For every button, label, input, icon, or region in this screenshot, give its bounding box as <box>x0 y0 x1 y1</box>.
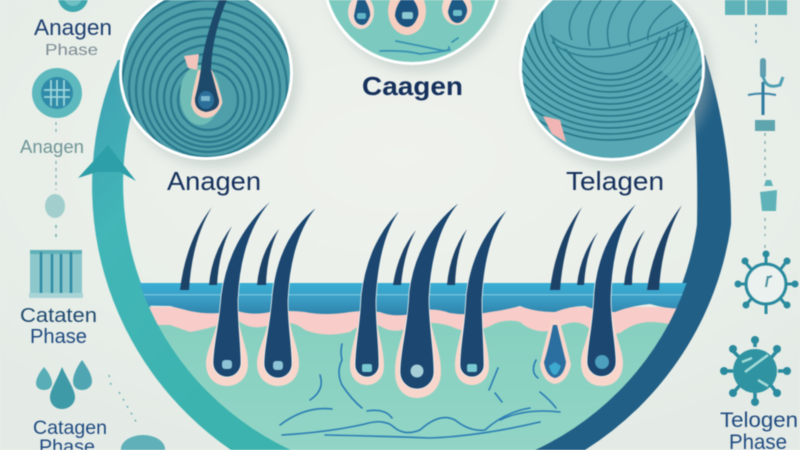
epidermis blue layer <box>100 283 720 315</box>
text: Catatten Phase: Cataten <box>20 305 97 327</box>
text: Catagen Phase <box>33 417 107 450</box>
cycle arrow: teal <box>78 60 300 450</box>
icon: water drops <box>36 360 92 409</box>
text: Catatten Phase <box>20 305 97 348</box>
follicle bulbs <box>354 0 370 25</box>
icon: block <box>755 120 775 131</box>
follicle 5 <box>455 207 510 385</box>
label: Anagen: Anagen <box>167 166 261 196</box>
panel: telagen circle <box>519 0 706 162</box>
text: Telogen Phase <box>720 409 798 450</box>
icon: small circle <box>45 194 65 218</box>
text: Catatten Phase: Phase <box>30 326 87 348</box>
icon: cup <box>760 180 777 211</box>
surface light line <box>100 294 720 296</box>
text: Anagen Phase: Anagen <box>34 15 112 40</box>
text: Anagen grey: Anagen <box>20 137 84 157</box>
dashed connector <box>764 218 766 236</box>
text: Telogen Phase: Telogen <box>720 409 798 432</box>
pink skin layer <box>100 307 720 335</box>
top strand bundle <box>548 0 688 50</box>
short hair strands <box>180 205 682 290</box>
icon: blob <box>121 435 165 450</box>
dotted connector <box>109 375 138 425</box>
follicle 6: fading <box>540 320 571 384</box>
text: Anagen Phase: Phase <box>45 42 98 59</box>
panel: catagen circle <box>322 0 502 65</box>
follicle 1 <box>206 197 275 386</box>
swirl strands <box>122 0 290 158</box>
icon: top circle <box>58 0 88 12</box>
circle shadows <box>125 0 711 169</box>
blood vessels <box>280 344 560 438</box>
right sidebar <box>720 0 798 450</box>
follicle 3 <box>350 207 403 385</box>
icon: virus outline <box>734 250 798 314</box>
icon: gear <box>32 68 82 118</box>
follicle halos <box>348 0 374 29</box>
label: Caagen: Caagen <box>362 71 463 101</box>
dashed connector <box>764 133 766 252</box>
cycle arrow: navy <box>522 55 731 450</box>
dashed connector <box>755 24 757 44</box>
left sidebar <box>20 0 165 450</box>
skin cross-section <box>140 282 687 450</box>
panel: anagen circle <box>118 0 294 160</box>
follicle 2 <box>257 205 319 386</box>
dashed connector <box>55 225 57 242</box>
icon: pillars <box>29 250 83 298</box>
follicle 4 <box>395 200 462 398</box>
pink scalp <box>543 116 566 142</box>
icon: figure <box>748 58 783 115</box>
icon: virus filled <box>720 336 791 406</box>
dermis layer <box>158 320 669 450</box>
arrow head: teal <box>78 145 136 181</box>
inner follicle pocket <box>180 65 220 125</box>
vessels <box>380 38 458 54</box>
hair follicles <box>206 197 640 398</box>
hair shaft <box>194 0 227 113</box>
text: Catagen Phase: Catagen <box>33 417 107 439</box>
lower strand coil <box>522 10 702 142</box>
follicle 7 <box>581 200 640 386</box>
icon: top pillars <box>725 0 787 15</box>
dashed connector <box>55 122 57 190</box>
text: Anagen Phase <box>34 15 112 59</box>
label: Telagen: Telagen <box>566 166 664 196</box>
